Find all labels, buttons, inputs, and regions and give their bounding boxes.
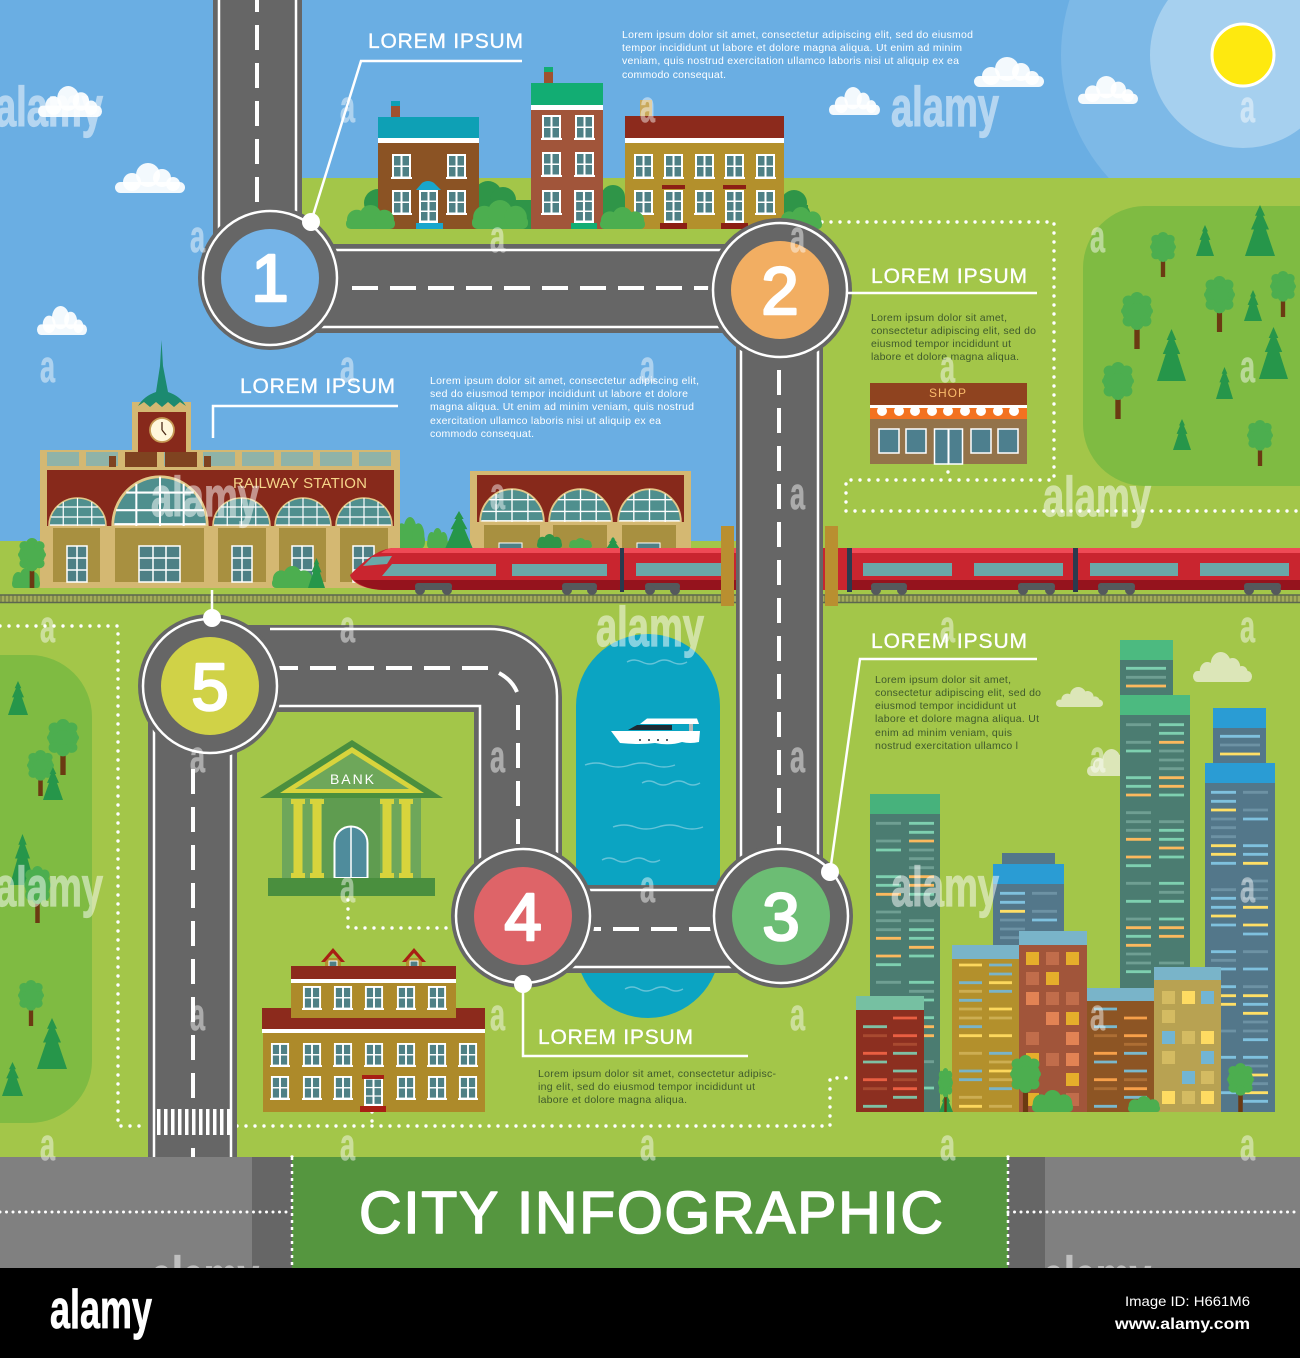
text block: shop	[871, 312, 1036, 363]
road: top to junction 1	[213, 0, 302, 278]
text block: houses: commodo consequat.	[622, 69, 726, 81]
large house	[262, 948, 485, 1112]
junction 2: 2	[761, 254, 799, 329]
crosswalk	[157, 1109, 230, 1135]
text block: houses: Lorem ipsum dolor sit amet, consectetur adipiscing elit, sed do eiusmod	[622, 29, 973, 41]
text block: houses: tempor incididunt ut labore et dolore magna aliqua. Ut enim ad minim	[622, 42, 962, 54]
junction 5: 5	[191, 650, 229, 725]
tower A	[870, 794, 940, 1112]
text block: bank	[538, 1068, 776, 1106]
text block: station: exercitation ullamco laboris nisi ut aliquip ex ea	[430, 415, 661, 427]
watermark pattern: a	[790, 731, 806, 782]
heading: houses: LOREM IPSUM	[368, 30, 523, 53]
junction 4: 4	[504, 880, 542, 955]
junction 2	[708, 218, 852, 362]
watermark pattern: alamy	[1043, 1245, 1151, 1308]
footer logo: alamy	[50, 1278, 152, 1340]
house: green roof	[531, 67, 603, 229]
text block: city: labore et dolore magna aliqua. Ut	[875, 713, 1039, 725]
title: CITY INFOGRAPHIC	[359, 1180, 943, 1246]
callout line 2	[848, 292, 1037, 294]
footer bar	[0, 1268, 1300, 1358]
icon: boat	[611, 718, 700, 744]
watermark pattern: a	[1240, 861, 1256, 912]
watermark pattern: a	[190, 731, 206, 782]
watermark pattern: a	[640, 341, 656, 392]
junction 5	[138, 614, 282, 758]
watermark pattern: a	[1090, 211, 1106, 262]
building F	[1019, 931, 1087, 1112]
station main building	[40, 450, 400, 588]
house: red roof	[625, 100, 784, 229]
text block: city: consectetur adipiscing elit, sed do	[875, 687, 1041, 699]
river	[576, 634, 720, 1018]
watermark pattern: a	[340, 1119, 356, 1170]
watermark pattern: a	[1090, 731, 1106, 782]
heading: shop: LOREM IPSUM	[871, 265, 1027, 288]
city skyline	[856, 640, 1275, 1112]
watermark pattern: a	[340, 601, 356, 652]
tower C	[1205, 708, 1275, 1112]
text block: shop: consectetur adipiscing elit, sed do	[871, 325, 1036, 337]
bank	[260, 740, 443, 896]
tower B	[1120, 640, 1190, 1005]
grass background	[0, 178, 1300, 1157]
couplers and bogies	[620, 548, 1078, 592]
watermark pattern: a	[40, 1119, 56, 1170]
tower D	[993, 853, 1064, 945]
tree and bushes front of station	[12, 538, 325, 588]
building G	[1087, 988, 1154, 1112]
text block: houses: veniam, quis nostrud exercitation ullamco laboris nisi ut aliquip ex ea	[622, 55, 959, 67]
road: junction 5 to bottom	[148, 686, 237, 1157]
text block: city: eiusmod tempor incididunt ut	[875, 700, 1016, 712]
text block: city	[875, 674, 1041, 752]
bottom road and title band	[0, 1157, 1300, 1268]
pale clouds	[1056, 652, 1252, 776]
watermark pattern: a	[940, 601, 956, 652]
callout line 4	[514, 975, 748, 1056]
trees near station	[395, 511, 620, 549]
text block: bank: ing elit, sed do eiusmod tempor incididunt ut	[538, 1081, 755, 1093]
junction 4	[451, 844, 595, 988]
watermark pattern: alamy	[151, 465, 259, 528]
text block: city: Lorem ipsum dolor sit amet,	[875, 674, 1011, 686]
panel: forest park left	[0, 655, 92, 1123]
station annex	[470, 471, 691, 549]
text block: shop: Lorem ipsum dolor sit amet,	[871, 312, 1007, 324]
watermark pattern: alamy	[151, 1245, 259, 1308]
text block: city: enim ad minim veniam, quis	[875, 727, 1012, 739]
train second car	[624, 548, 736, 590]
text block: station	[430, 375, 699, 440]
road: junction 2 to junction 3	[736, 290, 823, 916]
river waves	[585, 660, 703, 991]
watermark pattern: a	[490, 468, 506, 519]
watermark pattern: a	[490, 731, 506, 782]
footer image id: Image ID: H661M6	[1125, 1293, 1250, 1309]
bank sign: BANK	[330, 771, 375, 787]
callout line station	[213, 406, 398, 438]
shop	[870, 383, 1027, 464]
dotted route lines	[0, 222, 1300, 1268]
dormers	[321, 948, 426, 971]
callout line 5	[203, 590, 221, 627]
road: junction 4 to junction 5	[210, 625, 562, 916]
text block: bank: labore et dolore magna aliqua.	[538, 1094, 687, 1106]
train fourth car	[1078, 548, 1300, 590]
watermark pattern: alamy	[1043, 465, 1151, 528]
text block: station: Lorem ipsum dolor sit amet, consectetur adipiscing elit,	[430, 375, 699, 387]
skyline trees	[938, 1055, 1254, 1112]
railway station	[12, 340, 691, 588]
text block: shop: labore et dolore magna aliqua.	[871, 351, 1019, 363]
icon: sun	[1061, 0, 1300, 237]
watermark pattern: a	[640, 1119, 656, 1170]
bushes behind houses	[364, 181, 810, 229]
watermark pattern: alamy	[891, 75, 999, 138]
road: junction 3 to junction 4	[523, 885, 781, 973]
junction 3	[709, 844, 853, 988]
watermark pattern: a	[40, 341, 56, 392]
watermark pattern: a	[1090, 989, 1106, 1040]
train third car	[822, 548, 1073, 590]
road network	[148, 0, 823, 1157]
watermark pattern: a	[340, 81, 356, 132]
watermark pattern: a	[1240, 601, 1256, 652]
text block: city: nostrud exercitation ullamco l	[875, 740, 1018, 752]
watermark pattern: a	[640, 861, 656, 912]
callout line 1	[302, 61, 522, 231]
houses row	[346, 67, 822, 229]
building H	[1154, 967, 1221, 1112]
heading: station: LOREM IPSUM	[240, 375, 395, 398]
heading: city: LOREM IPSUM	[871, 630, 1027, 653]
train	[350, 548, 1300, 595]
junction 1	[198, 206, 342, 350]
watermark pattern: a	[490, 211, 506, 262]
watermark pattern: a	[1240, 81, 1256, 132]
text block: houses	[622, 29, 973, 81]
watermark pattern: a	[340, 861, 356, 912]
text block: station: magna aliqua. Ut enim ad minim veniam, quis nostrud	[430, 401, 694, 413]
watermark pattern: a	[940, 1119, 956, 1170]
watermark pattern: alamy	[891, 855, 999, 918]
text block: bank: Lorem ipsum dolor sit amet, consectetur adipisc-	[538, 1068, 776, 1080]
watermark pattern: alamy	[596, 595, 704, 658]
watermark pattern: a	[790, 989, 806, 1040]
watermark pattern: a	[190, 211, 206, 262]
bushes in front of houses	[346, 200, 822, 229]
watermark pattern: a	[40, 601, 56, 652]
watermark pattern: a	[790, 211, 806, 262]
text block: station: sed do eiusmod tempor incididunt ut labore et dolore	[430, 388, 688, 400]
building E	[952, 945, 1019, 1112]
watermark pattern: a	[640, 81, 656, 132]
building I	[856, 996, 924, 1112]
watermark pattern: a	[1240, 1119, 1256, 1170]
house: teal roof	[378, 101, 479, 229]
bridge pillars	[721, 526, 838, 606]
watermark pattern: a	[490, 989, 506, 1040]
railway tracks	[0, 595, 1300, 603]
panel: forest park right	[1083, 205, 1300, 486]
station sign: RAILWAY STATION	[233, 475, 367, 492]
clouds in sky	[37, 57, 1138, 335]
footer website: www.alamy.com	[1114, 1316, 1250, 1333]
watermark pattern: a	[790, 468, 806, 519]
junction 1: 1	[251, 241, 289, 316]
text block: station: commodo consequat.	[430, 428, 534, 440]
clock tower	[132, 340, 191, 452]
shop sign: SHOP	[929, 386, 967, 400]
road: junction 1 to junction 2	[270, 244, 780, 333]
junction 3: 3	[762, 880, 800, 955]
watermark pattern: a	[1240, 341, 1256, 392]
watermark pattern: a	[190, 989, 206, 1040]
sky background	[0, 0, 1300, 545]
watermark pattern: a	[340, 341, 356, 392]
train head car	[350, 548, 620, 590]
callout line 3	[821, 659, 1037, 881]
watermark pattern: a	[940, 341, 956, 392]
text block: shop: eiusmod tempor incididunt ut	[871, 338, 1011, 350]
heading: bank: LOREM IPSUM	[538, 1026, 693, 1049]
